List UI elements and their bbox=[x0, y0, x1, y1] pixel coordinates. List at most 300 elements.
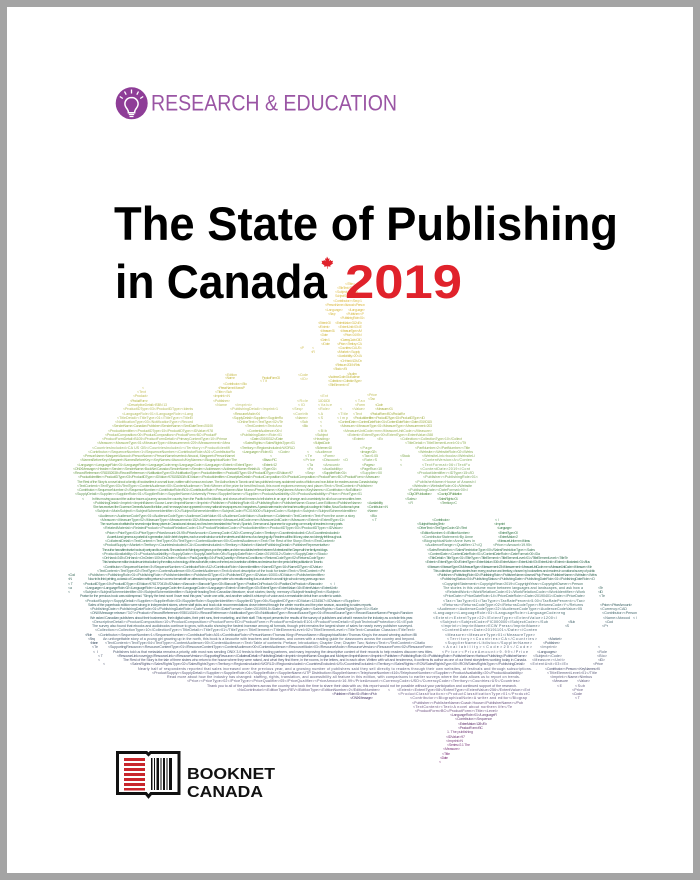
map of Canada drawn from lines of metadata text: <Name> bbox=[367, 509, 378, 513]
map of Canada drawn from lines of metadata text: ProductForm 03 bbox=[262, 376, 280, 380]
map of Canada drawn from lines of metadata text: <Subject><Main bbox=[335, 290, 358, 294]
map of Canada drawn from lines of metadata text: < bbox=[598, 645, 600, 649]
map of Canada drawn from lines of metadata text: <Title bbox=[442, 752, 450, 756]
map of Canada drawn from lines of metadata text: <T bbox=[68, 582, 74, 586]
map of Canada drawn from lines of metadata text: <Form bbox=[355, 403, 365, 407]
map of Canada drawn from lines of metadata text: <ID bbox=[298, 403, 305, 407]
map of Canada drawn from lines of metadata text: <IDValue>97 bbox=[446, 735, 465, 739]
map of Canada drawn from lines of metadata text: <Availability> bbox=[322, 467, 343, 471]
map of Canada drawn from lines of metadata text: < bbox=[82, 497, 84, 501]
map of Canada drawn from lines of metadata text: <ContentVersion>A</Conten bbox=[422, 458, 472, 462]
title bbox=[114, 197, 618, 308]
map of Canada drawn from lines of metadata text: <Publisher><PublisherName>Coach House</PublisherName></Pub bbox=[412, 701, 523, 705]
map of Canada drawn from lines of metadata text: <Returns><ReturnsCodeType>02</ReturnsCodeType><ReturnsCode>Y</Returns bbox=[442, 603, 583, 607]
map of Canada drawn from lines of metadata text: <Collection><CollectionType>10</Collect bbox=[400, 437, 462, 441]
map of Canada drawn from lines of metadata text: <SalesRights><SalesRightsType>01 bbox=[243, 441, 295, 445]
map of Canada drawn from lines of metadata text: <PageRun>10 bbox=[360, 467, 382, 471]
map of Canada drawn from lines of metadata text: <Ta bbox=[307, 463, 313, 467]
map of Canada drawn from lines of metadata text: <Price><PriceAmount>9.99</Price bbox=[442, 650, 528, 654]
map of Canada drawn from lines of metadata text: <Sub bbox=[300, 420, 308, 424]
map of Canada drawn from lines of metadata text: < bbox=[98, 658, 100, 662]
heading: research and education: RESEARCH & EDUCATION bbox=[151, 91, 397, 116]
map of Canada drawn from lines of metadata text: 1. The publishing bbox=[447, 730, 473, 734]
map of Canada drawn from lines of metadata text: <N bbox=[68, 577, 72, 581]
map of Canada drawn from lines of metadata text: <CopyrightStatement><CopyrightYear>2019</CopyrightYear><CopyrightOwner><Person bbox=[442, 582, 583, 586]
map of Canada drawn from lines of metadata text: <Seq> bbox=[305, 471, 315, 475]
map of Canada drawn from lines of metadata text: <Te bbox=[598, 586, 603, 590]
map of Canada drawn from lines of metadata text: <Contributor><N bbox=[367, 505, 388, 509]
map of Canada drawn from lines of metadata text: <CountryOfPublication bbox=[437, 492, 462, 496]
map of Canada drawn from lines of metadata text: Sales of the paperback edition were strong in independent stores, where staff picks and book club recommendations drove interest through the winter months and the prize season, according to sales reports. bbox=[88, 603, 372, 607]
icon: open book with barcode bbox=[118, 752, 179, 796]
map of Canada drawn from lines of metadata text: <Date bbox=[440, 756, 448, 760]
map of Canada drawn from lines of metadata text: < bbox=[68, 590, 70, 594]
header: research and education bbox=[116, 87, 397, 119]
map of Canada drawn from lines of metadata text: <OnlineText><TextType>02</Te bbox=[237, 420, 283, 424]
map of Canada drawn from lines of metadata text: <ProductFormDetail>B105</ProductFormDetail><PrimaryContentType>10</Primar bbox=[102, 437, 228, 441]
map of Canada drawn from lines of metadata text: < bbox=[307, 450, 309, 454]
map of Canada drawn from lines of metadata text: < bbox=[388, 688, 390, 692]
map of Canada drawn from lines of metadata text: <ContributorStatement>By Anne bbox=[422, 535, 473, 539]
map of Canada drawn from lines of metadata text: <Collection><CollectionType>10</CollectionType><TitleDetail><TitleType>01</TitleType><TitleElement><TitleElementLevel>02</TitleElementLevel><TitleText>Canadian Classics</TitleText> bbox=[95, 628, 415, 632]
map of Canada drawn from lines of metadata text: </Market><Supply bbox=[337, 350, 360, 354]
map of Canada drawn from lines of metadata text: <P bbox=[300, 346, 305, 350]
map of Canada drawn from lines of metadata text: <RecordReference>9781552638</RecordReference><NotificationType>03</NotificationType><ProductIdentifier><ProductIDType>15</ProductIDType><IDValue>97 bbox=[73, 471, 293, 475]
map of Canada drawn from lines of metadata text: <TextContent><TextType>02</TextType><ContentAudience>00</ContentAudience><Text>A short description of the book for trade</Text></TextContent><Pri bbox=[97, 569, 325, 573]
map of Canada drawn from lines of metadata text: <Tax bbox=[355, 399, 365, 403]
map of Canada drawn from lines of metadata text: <Audience><AudienceCodeType>01</AudienceCodeType><AudienceCodeValue>01</AudienceCodeValue></Audience><Collateral><TextContent><Text>From the cover: a story bbox=[98, 514, 355, 518]
map of Canada drawn from lines of metadata text: <Name>Atwood bbox=[603, 616, 630, 620]
map of Canada drawn from lines of metadata text: <ExtentValue>128</Ex bbox=[458, 722, 487, 726]
map of Canada drawn from lines of metadata text: <Subject><MainSubject/><SubjectSchemeIdentifier>10</SubjectSchemeIdentifier><SubjectCode>FIC019000</SubjectCode></Subject><Subject><SubjectSchemeIdentifier> bbox=[95, 509, 357, 513]
map of Canada drawn from lines of metadata text: Now in its third printing, a classic of Canadian writing returns in a new format with an afterword by a younger writer who recalls reading it as a student in a rural high school many years ago now. bbox=[88, 577, 325, 581]
map of Canada drawn from lines of metadata text: <ExtentUnit>03</E bbox=[338, 325, 363, 329]
map of Canada drawn from lines of metadata text: </Date bbox=[321, 342, 330, 346]
map of Canada drawn from lines of metadata text: Praise for the previous book was widespread. "Simply the best novel I have read this year," wrote one critic, and another called it a triumph of voice and a remarkable debut from a writer to watch. bbox=[80, 594, 342, 598]
map of Canada drawn from lines of metadata text: <Name bbox=[215, 403, 227, 407]
map of Canada drawn from lines of metadata text: <Language> bbox=[325, 308, 343, 312]
map of Canada drawn from lines of metadata text: <ID> bbox=[300, 377, 308, 381]
map of Canada drawn from lines of metadata text: <Contributor><Bio bbox=[223, 382, 247, 386]
map of Canada drawn from lines of metadata text: <ExtentValue>2 bbox=[498, 535, 518, 539]
map of Canada drawn from lines of metadata text: <Availability bbox=[367, 501, 383, 505]
map of Canada drawn from lines of metadata text: <PublishingRole>01< bbox=[340, 316, 365, 320]
map of Canada drawn from lines of metadata text: <MeasureType></M bbox=[340, 329, 362, 333]
map of Canada drawn from lines of metadata text: <R bbox=[408, 501, 413, 505]
map of Canada drawn from lines of metadata text: <Cod bbox=[605, 620, 613, 624]
map of Canada drawn from lines of metadata text: <Pr bbox=[602, 624, 609, 628]
map of Canada drawn from lines of metadata text: <Tax><TaxType>01</TaxType><TaxRatePercent>5.00</TaxRatePercent></Tax> bbox=[443, 599, 585, 603]
map of Canada drawn from lines of metadata text: <Contributor><Seq>1 bbox=[333, 299, 362, 303]
map of Canada drawn from lines of metadata text: The Rest of the Story is a novel about a family of booksellers in a small town, written with humour and care. The Author lives in Toronto and has published many acclaimed works of fiction and non-fiction for readers across Canada today. bbox=[77, 480, 378, 484]
map of Canada drawn from lines of metadata text: <Type>01< bbox=[262, 467, 277, 471]
map of Canada drawn from lines of metadata text: <S bbox=[318, 416, 324, 420]
map of Canada drawn from lines of metadata text: <Imprint><ImprintName>ECW Press</ImprintName> bbox=[441, 624, 540, 628]
map of Canada drawn from lines of metadata text: </Price><Territory>CA bbox=[337, 342, 363, 346]
map of Canada drawn from lines of metadata text: <MeasureUnit>mm</Meas bbox=[497, 539, 530, 543]
map of Canada drawn from lines of metadata text: <AudienceRange><Qualifier>17</Q bbox=[425, 543, 482, 547]
map of Canada drawn from lines of metadata text: <Date>1 bbox=[320, 338, 330, 342]
map of Canada drawn from lines of metadata text: <ContentDate><ContentDateRole>01</ContentDateRole><Date>20190115 bbox=[338, 420, 432, 424]
map of Canada drawn from lines of metadata text: <E bbox=[557, 684, 563, 688]
map of Canada drawn from lines of metadata text: <S bbox=[565, 624, 570, 628]
map of Canada drawn from lines of metadata text: <ONIXMessage><Header><Sender><SenderName>BookNet Canada</SenderName></Sender><Addressee><AddresseeName>Retail</A bbox=[73, 467, 261, 471]
map of Canada drawn from lines of metadata text: </ bbox=[330, 582, 335, 586]
map of Canada drawn from lines of metadata text: <Audience bbox=[315, 450, 332, 454]
map of Canada drawn from lines of metadata text: <Imprint><N bbox=[213, 394, 230, 398]
map of Canada drawn from lines of metadata text: <I bbox=[93, 650, 98, 654]
map of Canada drawn from lines of metadata text: <SupplierRole>01< bbox=[322, 471, 347, 475]
map of Canada drawn from lines of metadata text: < bbox=[439, 760, 441, 764]
map of Canada drawn from lines of metadata text: <SalesRights>01 bbox=[437, 497, 458, 501]
map of Canada drawn from lines of metadata text: <Bio bbox=[302, 424, 308, 428]
map of Canada drawn from lines of metadata text: <Text bbox=[353, 412, 362, 416]
map of Canada drawn from lines of metadata text: </ bbox=[633, 616, 637, 620]
map of Canada drawn from lines of metadata text: <Image>02< bbox=[360, 450, 377, 454]
map of Canada drawn from lines of metadata text: The author has written twelve books of poetry and four novels. She was born in Winnipeg and grew up on the prairies, and she now divides her time between Montreal and the Gaspe with her family and dogs. bbox=[102, 548, 328, 552]
map of Canada drawn from lines of metadata text: <ContentDate>2019</Cont bbox=[420, 467, 470, 471]
map of Canada drawn from lines of metadata text: <Stock></St bbox=[333, 367, 347, 371]
map of Canada drawn from lines of metadata text: <Ex bbox=[377, 437, 383, 441]
map of Canada drawn from lines of metadata text: <Extent><ExtentType>08</ExtentType><ExtentValue>256</ExtentValue><Ext bbox=[397, 688, 530, 692]
map of Canada drawn from lines of metadata text: <Price><PriceType>02</PriceType><PriceQualifier>05</PriceQualifier><PriceAmount>16.99</PriceAmount><CurrencyCode>USD</CurrencyCode><Territory><Countries>US</Countries> bbox=[187, 679, 520, 683]
map of Canada drawn from lines of metadata text: The survey also found that ebooks and audiobooks continue to grow, with audio showing the fastest increase among all formats, though print remains the largest share of sales for nearly every publisher surveyed. bbox=[92, 624, 413, 628]
map of Canada drawn from lines of metadata text: <Measure><MeasureType>01</MeasureType> bbox=[445, 633, 535, 637]
map of Canada drawn from lines of metadata text: <Bio> bbox=[597, 654, 607, 658]
map of Canada drawn from lines of metadata text: < bbox=[400, 458, 402, 462]
map of Canada drawn from lines of metadata text: </Title> bbox=[345, 282, 355, 286]
map of Canada drawn from lines of metadata text: <Form> bbox=[323, 454, 335, 458]
map of Canada drawn from lines of metadata text: <PublishingDetail><Imprint><ImprintName>Goose Lane</ImprintName></Imprint><Publisher><PublishingRole>01</PublishingRole><PublisherName>Goose Lane Editions</PublisherName> bbox=[93, 501, 362, 505]
map of Canada drawn from lines of metadata text: <ProductIDType>15</ProductIDType><IDValue>9781770415</IDValue><Barcode><BarcodeType>03</BarcodeType><PositionOnProduct>01</PositionOnProduct></Barcode> bbox=[83, 582, 323, 586]
map of Canada drawn from lines of metadata text: She has received the Governor General's Award for fiction, and her essays have appeared in many national newspapers and magazines. A passionate reader, she teaches writing at a college in Halifax, Nova Scotia each year. bbox=[93, 505, 360, 509]
map of Canada drawn from lines of metadata text: <MeasureUnitCode>mm</MeasureUnitCode></Measure> bbox=[343, 429, 432, 433]
map of Canada drawn from lines of metadata text: <Measure bbox=[552, 679, 568, 683]
map of Canada drawn from lines of metadata text: <Languages> bbox=[537, 650, 557, 654]
map of Canada drawn from lines of metadata text: <SalesRights><SalesRightsType>02</SalesRightsType><Territory><RegionsIncluded>WORLD</RegionsIncluded><CountriesExcluded>US</CountriesExcluded></Territory></SalesRights><ROWSalesRightsType>00</ROWSalesRightsType></PublishingDetail> bbox=[130, 662, 525, 666]
map of Canada drawn from lines of metadata text: <Measure><MeasureType>03</MeasureType><Measurement>23</Measurement><MeasureUnitCode>mm</MeasureUnitCode></Measure><Me bbox=[427, 565, 592, 569]
map of Canada drawn from lines of metadata text: <SupplyDetail><Supplier><SupplierRole>01</SupplierRole><SupplierName>University Press</SupplierName></Supplier><ProductAvailability>20</ProductAvailability><Price><PriceType>01 bbox=[75, 492, 362, 496]
map of Canada drawn from lines of metadata text: An unforgettable story of a young girl growing up in the north, this book is a favourite with teachers and librarians, and comes with a reading guide for classrooms across the country and beyond. bbox=[103, 637, 415, 641]
map of Canada drawn from lines of metadata text: <Tax>0.05 bbox=[362, 454, 378, 458]
map of Canada drawn from lines of metadata text: A careful and generous portrait of a generation, told in brief chapters, each a small window onto the streets and kitchens of a changing city. Readers will find it funny, wise and deeply felt throughout. bbox=[107, 535, 342, 539]
map of Canada drawn from lines of metadata text: <Cod bbox=[68, 573, 75, 577]
map of Canada drawn from lines of metadata text: <Series>2.1 The bbox=[447, 743, 470, 747]
map of Canada drawn from lines of metadata text: <Supplier>00 bbox=[360, 471, 382, 475]
map of Canada drawn from lines of metadata text: <CountriesIncluded>CA US GB</CountriesIncluded></Territory><ProductIdentifi bbox=[92, 446, 230, 450]
map of Canada drawn from lines of metadata text: <Tax bbox=[368, 397, 375, 401]
map of Canada drawn from lines of metadata text: <Seq bbox=[88, 637, 95, 641]
map of Canada drawn from lines of metadata text: <TitleElementLevel>01</Title bbox=[547, 671, 597, 675]
map of Canada drawn from lines of metadata text: <Imprint> bbox=[235, 403, 252, 407]
wordmark bbox=[187, 766, 276, 801]
map of Canada drawn from lines of metadata text: <WebsiteLink>books</WebsiteLi bbox=[422, 454, 475, 458]
map of Canada drawn from lines of metadata text: SubjectScheme bbox=[335, 294, 355, 298]
map of Canada drawn from lines of metadata text: <Contributor><Sequence bbox=[455, 717, 492, 721]
map of Canada drawn from lines of metadata text: <Date bbox=[320, 333, 328, 337]
map of Canada drawn from lines of metadata text: <Language><LanguageRole>02</LanguageRole><LanguageCode>fre</LanguageCode></Language><Extent><ExtentType>03</ExtentType><ExtentValue>16</ExtentValue><ExtentUnit> bbox=[85, 586, 338, 590]
map of Canada drawn from lines of metadata text: <Fo bbox=[307, 467, 313, 471]
map of Canada drawn from lines of metadata text: <ContentAudience>00</ bbox=[247, 429, 282, 433]
map of Canada drawn from lines of metadata text: This handsome edition includes an introduction by the editor, a chronology of the author's life, notes on the text, and a selection of letters and reviews from the period of first publication in Toronto. bbox=[102, 560, 323, 564]
map of Canada drawn from lines of metadata text: <ProductSupply><SupplyDetail><Supplier><SupplierRole>03</SupplierRole><SupplierIdentifier><SupplierIDType>06</SupplierIDType><IDValue>1234567</IDValue></Supplier> bbox=[85, 599, 360, 603]
map of Canada drawn from lines of metadata text: <Territory><Countries>CA</Countries> bbox=[447, 637, 537, 641]
map of Canada drawn from lines of metadata text: <Discount> bbox=[322, 458, 340, 462]
map of Canada drawn from lines of metadata text: <Price><PriceType>01</PriceType><PriceAmount>24.95</PriceAmount><CurrencyCode>CAD</CurrencyCode><Territory><CountriesIncluded>CA</CountriesIncluded> bbox=[105, 531, 340, 535]
map of Canada drawn from lines of metadata text: <ONIXMessage release="3.0"><Product><RecordReference>9780143191</RecordReference><NotificationType>03</NotificationType><RecordSourceType>01</RecordSourceType><RecordSourceName>Penguin Random bbox=[90, 611, 413, 615]
map of Canada drawn from lines of metadata text: <SalesRestriction><SalesRestrictionType>00</SalesRestrictionType><Sales bbox=[427, 548, 535, 552]
map of Canada drawn from lines of metadata text: <ProductIdentifier><ProductIDType>15</ProductIDType><ID bbox=[353, 416, 425, 420]
map of Canada drawn from lines of metadata text: <ProductSupply><Market><Territory><CountriesIncluded>CA</CountriesIncluded></Territory></Market><MarketPublishingDetail><PublisherRepresentative> bbox=[103, 543, 330, 547]
map of Canada drawn from lines of metadata text: <Language> bbox=[497, 526, 512, 530]
map of Canada drawn from lines of metadata text: <EditionNumber>1</EditionNumber> bbox=[420, 531, 470, 535]
map of Canada drawn from lines of metadata text: <Publisher><PublishingRole>02</PublishingRole><PublisherName>Arsenal Pulp Press</PublisherName><Website><Webs bbox=[437, 573, 597, 577]
map of Canada drawn from lines of metadata text: <PublishingDate><DateFormat>00</ bbox=[408, 488, 468, 492]
map of Canada drawn from lines of metadata text: <SenderName>Canadian Publisher</SenderName><SentDateTime>20190 bbox=[112, 424, 213, 428]
map of Canada drawn from lines of metadata text: </ONIXMessage> bbox=[350, 696, 373, 700]
map of Canada drawn from lines of metadata text: <Extent><ExtentType>22</ExtentType><ExtentValue>1200</ bbox=[433, 616, 557, 620]
map of Canada drawn from lines of metadata text: <ResourceMode>04 bbox=[233, 412, 260, 416]
map of Canada drawn from lines of metadata text: <Availability>20</A bbox=[337, 354, 363, 358]
map of Canada drawn from lines of metadata text: <Title bbox=[338, 412, 348, 416]
map of Canada drawn from lines of metadata text: <Role> bbox=[318, 407, 330, 411]
map of Canada drawn from lines of metadata text: <Pages> bbox=[362, 463, 375, 467]
map of Canada drawn from lines of metadata text: <Name bbox=[225, 376, 235, 380]
map of Canada drawn from lines of metadata text: </ bbox=[495, 518, 499, 522]
map of Canada drawn from lines of metadata text: <Measure> bbox=[443, 747, 460, 751]
map of Canada drawn from lines of metadata text: <Role bbox=[297, 399, 308, 403]
map of Canada drawn from lines of metadata text: <Price>24.95</ bbox=[343, 333, 362, 337]
map of Canada drawn from lines of metadata text: <DescriptiveDetail>ISBN 13 bbox=[127, 403, 167, 407]
map of Canada drawn from lines of metadata text: < bbox=[400, 463, 402, 467]
map of Canada drawn from lines of metadata text: <SupportingResource><ResourceContentType>01</ResourceContentType><ContentAudience>00</ContentAudience><ResourceMode>03</ResourceMode><ResourceVersion><ResourceForm>02</ResourceForm> bbox=[108, 645, 433, 649]
map of Canada drawn from lines of metadata text: <Seq> bbox=[328, 312, 336, 316]
map of Canada drawn from lines of metadata text: <Market> bbox=[548, 637, 562, 641]
map of Canada drawn from lines of metadata text: <Website><WebsiteRole>01</Website bbox=[412, 484, 472, 488]
map of Canada drawn from lines of metadata text: <ExtentType>00 bbox=[498, 531, 518, 535]
map of Canada drawn from lines of metadata text: <Stock bbox=[400, 454, 410, 458]
map of Canada drawn from lines of metadata text: <Te bbox=[305, 454, 312, 458]
map of Canada drawn from lines of metadata text: <Value> bbox=[577, 679, 590, 683]
map of Canada drawn from lines of metadata text: <Code> bbox=[278, 450, 290, 454]
map of Canada drawn from lines of metadata text: <NotificationType>03</NotificationType><Record bbox=[115, 420, 193, 424]
map of Canada drawn from lines of metadata text: <Publisher><PublishingRole>01</PublishingRole><PublisherIdentifier><PublisherIDType>01</PublisherIDType><IDValue>10001</IDValue></PublisherIdentifier> bbox=[88, 573, 325, 577]
map of Canada drawn from lines of metadata text: <CollateralDetail><TextContent><TextType>03</TextType><ContentAudience>00</ContentAudience><Text>The Rest of the Story</Text></TextContent> bbox=[105, 539, 335, 543]
map of Canada drawn from lines of metadata text: <SupplierName>Litdistco</SupplierName> bbox=[445, 641, 532, 645]
map of Canada drawn from lines of metadata text: <NamesBeforeKey>Margaret</NamesBeforeKey><KeyNames>Atwood</KeyNames><BiographicalNote>The bbox=[80, 458, 237, 462]
map of Canada drawn from lines of metadata text: <Value> bbox=[352, 407, 365, 411]
map of Canada drawn from lines of metadata text: <Heading> bbox=[313, 437, 330, 441]
map of Canada drawn from lines of metadata text: <Measure><Unit> bbox=[532, 658, 565, 662]
map of Canada drawn from lines of metadata text: < bbox=[312, 346, 314, 350]
map of Canada drawn from lines of metadata text: <Seq> bbox=[292, 407, 303, 411]
map of Canada drawn from lines of metadata text: <Measure><MeasureType>01</MeasureType><Measurement>229</Measurement><Mea bbox=[97, 441, 230, 445]
title line two: in Canada bbox=[115, 255, 328, 308]
map of Canada drawn from lines of metadata text: <Subject><SubjectCode>FIC000000</SubjectCode></Sub bbox=[440, 620, 548, 624]
map of Canada drawn from lines of metadata text: <ProductComposition>00</ProductComposition><ProductForm>BC</ProductF bbox=[105, 433, 218, 437]
map of Canada drawn from lines of metadata text: <Imprint> bbox=[540, 645, 557, 649]
map of Canada drawn from lines of metadata text: <RelatedWork><WorkRelationCode>01</WorkRelationCode><WorkIdentifier><Work bbox=[445, 590, 585, 594]
map of Canada drawn from lines of metadata text: <ProductClassification><ProductClassificationType>01</ProductC bbox=[398, 692, 530, 696]
map of Canada drawn from lines of metadata text: < bbox=[142, 386, 144, 390]
map of Canada drawn from lines of metadata text: In this moving account the author traces a journey across the country, from the Pacific to the Atlantic, and shows what it means to tell stories in an age of change and uncertainty for all of our communities here. bbox=[92, 497, 362, 501]
map of Canada drawn from lines of metadata text: <Rate>S bbox=[362, 458, 378, 462]
map of Canada drawn from lines of metadata text: <DescriptiveDetail><ProductComposition>10</ProductComposition><ProductForm>ED</ProductForm><ProductFormDetail>E101</ProductFormDetail><EpubTechnicalProtection>01</Epub bbox=[92, 620, 413, 624]
map of Canada drawn from lines of metadata text: <ProductIDType>03</ProductIDType><Idents bbox=[123, 407, 193, 411]
map of Canada drawn from lines of metadata text: <Subject><SubjectSchemeIdentifier>20</SubjectSchemeIdentifier><SubjectHeadingText>Canadian literature; short stories; family; memory</SubjectHeadingText></Subject> bbox=[83, 590, 340, 594]
map of Canada drawn from lines of metadata text: <Publisher> bbox=[543, 641, 560, 645]
map of Canada drawn from lines of metadata text: <Publisher> bbox=[213, 399, 230, 403]
map of Canada drawn from lines of metadata text: <Price bbox=[303, 458, 315, 462]
map of Canada drawn from lines of metadata text: <Subject bbox=[315, 433, 328, 437]
map of Canada drawn from lines of metadata text: <Value bbox=[318, 403, 332, 407]
map of Canada drawn from lines of metadata text: <SubjectCode bbox=[313, 441, 330, 445]
map of Canada drawn from lines of metadata text: <Price bbox=[572, 688, 583, 692]
icon: light bulb bbox=[116, 87, 148, 119]
map of Canada drawn from lines of metadata text: <ProductIdentifier><ProductIDType>15</ProductIDType><IDValue>978 bbox=[108, 429, 213, 433]
map of Canada drawn from lines of metadata text: <Language><Role>01 bbox=[242, 450, 273, 454]
map of Canada drawn from lines of metadata text: <TextFormat>06</TextFo bbox=[422, 463, 470, 467]
map of Canada drawn from lines of metadata text: </Extent> bbox=[318, 325, 330, 329]
map of Canada drawn from lines of metadata text: <PublishingDate><Role>01 bbox=[240, 433, 282, 437]
map of Canada drawn from lines of metadata text: <Title><Sub bbox=[215, 390, 232, 394]
map of Canada drawn from lines of metadata text: </Language> bbox=[348, 308, 365, 312]
map of Canada drawn from lines of metadata text: <Te bbox=[92, 645, 98, 649]
map of Canada drawn from lines of metadata text: <TextContent><TextType>04</TextType><ContentAudience>00</ContentAudience><Text>Table of contents: Preface; Introduction; Chapter One; Chapter Two; Notes</Text></TextContent><Citatio bbox=[105, 641, 425, 645]
map of Canada drawn from lines of metadata text: <Measure>01 bbox=[375, 407, 393, 411]
map of Canada drawn from lines of metadata text: <Territory>C bbox=[440, 501, 457, 505]
map of Canada drawn from lines of metadata text: <T bbox=[575, 696, 581, 700]
map of Canada drawn from lines of metadata text: <TitleDetail><TitleType>01</TitleType><TitleElement><TitleElementLevel>01</TitleElementLevel><TitleTe bbox=[428, 556, 568, 560]
map of Canada drawn from lines of metadata text: <T bbox=[98, 654, 104, 658]
map of Canada drawn from lines of metadata text: <Scheme>10 bbox=[315, 446, 332, 450]
map of Canada drawn from lines of metadata text: <Imprint><Name>Nimbus bbox=[550, 675, 592, 679]
map of Canada drawn from lines of metadata text: <Language><LanguageRole>01</LanguageRole><LanguageCode>eng bbox=[433, 611, 565, 615]
map of Canada drawn from lines of metadata text: <OtherText><TextTypeCode>02</Text bbox=[417, 526, 467, 530]
map of Canada drawn from lines of metadata text: <Bisac>FIC bbox=[262, 458, 277, 462]
map of Canada drawn from lines of metadata text: <Contrib bbox=[293, 412, 308, 416]
map of Canada drawn from lines of metadata text: <Contributor> bbox=[432, 518, 450, 522]
map of Canada drawn from lines of metadata text: <PublisherName>House of Anansi</ bbox=[415, 480, 476, 484]
map of Canada drawn from lines of metadata text: <Role bbox=[85, 633, 92, 637]
map of Canada drawn from lines of metadata text: <Bib bbox=[318, 429, 327, 433]
map of Canada drawn from lines of metadata text: <Extent>00 bbox=[318, 321, 331, 325]
map of Canada drawn from lines of metadata text: <Contributor><SequenceNumber>3</SequenceNumber><ContributorRole>A12</ContributorRole><NameIdentifier><NameIDType>16</NameIDType><IDValue> bbox=[103, 565, 323, 569]
map of Canada drawn from lines of metadata text: <Page bbox=[360, 446, 372, 450]
map of Canada drawn from lines of metadata text: <Imp bbox=[337, 416, 348, 420]
map of Canada drawn from lines of metadata text: <CityOfPublication> bbox=[407, 492, 432, 496]
map of Canada drawn from lines of metadata text: <PublishingDetail><Imprint>1 bbox=[230, 407, 278, 411]
map of Canada drawn from lines of metadata text: <PriceDate><PriceDateRole>14</PriceDateRole><Date>20190401</Date></PriceDate> bbox=[443, 594, 585, 598]
map of Canada drawn from lines of metadata text: <R bbox=[311, 350, 315, 354]
year 2019: 2019 bbox=[345, 255, 462, 308]
map of Canada drawn from lines of metadata text: <Imprint bbox=[494, 522, 505, 526]
map of Canada drawn from lines of metadata text: <Extent> bbox=[352, 437, 365, 441]
map of Canada drawn from lines of metadata text: <Price><PriceAmount> bbox=[600, 603, 632, 607]
map of Canada drawn from lines of metadata text: <Extent><ExtentType>00</ExtentType><ExtentValue>336</ExtentValue><ExtentUnit>03</ExtentUnit></Extent><Illustrated>01</Illus bbox=[425, 560, 590, 564]
map of Canada drawn from lines of metadata text: <Contributor><SequenceNumber>2</SequenceNumber><ContributorRole>B01</ContributorRole><PersonName>Alice Munro</PersonName><KeyNames>Munro</KeyNames></Contributor><NoEdition/> bbox=[77, 488, 362, 492]
map of Canada drawn from lines of metadata text: <Audien bbox=[347, 372, 357, 376]
map of Canada drawn from lines of metadata text: <Price><Amount>19.95< bbox=[493, 543, 532, 547]
map of Canada drawn from lines of metadata text: <CurrencyCode>CAD bbox=[340, 338, 362, 342]
icon: red maple leaf bbox=[321, 256, 333, 269]
map of Canada drawn from lines of metadata text: <TitleDetail><TitleElementLevel>01</Tit bbox=[405, 441, 466, 445]
map of Canada drawn from lines of metadata text: < bbox=[103, 662, 105, 666]
map of Canada drawn from lines of metadata text: Read more about how the industry has changed: staffing, rights, translation, and accessibility all feature in this edition, with comparisons to earlier surveys where the data allows us to report on trends. bbox=[167, 675, 520, 679]
map of Canada drawn from lines of metadata text: <Te bbox=[599, 594, 605, 598]
wordmark: BOOKNET bbox=[187, 766, 276, 783]
map of Canada drawn from lines of metadata text: <ContentDate><ContentDateRole>01</ContentDateRole><DateFormat>00</Da bbox=[428, 552, 540, 556]
map of Canada drawn from lines of metadata text: <TextContent><TextType>03</TextType><ContentAudience>00</ContentAudience><Text>Winner of the prize for best first book, this novel explores memory and place</Text></TextContent><Publisher> bbox=[77, 484, 373, 488]
map of Canada drawn from lines of metadata text: <RelatedMaterial><RelatedProduct><ProductRelationCode>13</ProductRelationCode><ProductIdentifier><ProductIDType>03</ProductIDType><IDValue> bbox=[103, 526, 343, 530]
map of Canada drawn from lines of metadata text: <Currency>CAD bbox=[600, 607, 627, 611]
map of Canada drawn from lines of metadata text: <PersonName>Munro</P bbox=[218, 386, 246, 390]
map of Canada drawn from lines of metadata text: 1.00 1000 bbox=[318, 399, 330, 403]
map of Canada drawn from lines of metadata text: <Publisher><Role>01</Role></Pub bbox=[332, 692, 377, 696]
map of Canada drawn from lines of metadata text: The Rest of the Story is the tale of three sisters who return to the house where they were raised, and what they find there, in the rooms, in the letters, and in each other. Written with wit and tenderness, it confirms its author as one of our finest storytellers working today in Canada. bbox=[123, 658, 527, 662]
map of Canada drawn from lines of metadata text: <PartNumber>2</PartNumber><Title bbox=[415, 446, 470, 450]
map of Canada drawn from lines of metadata text: <Code bbox=[572, 692, 582, 696]
map of Canada drawn from lines of metadata text: We asked Canadian publishers about their businesses, their digital sales, their print runs, their marketing, and their staff. This report presents the results of the survey of publishers and what it means for the industry as a whole this year. bbox=[90, 616, 413, 620]
map of Canada drawn from lines of metadata text: <Reissue>2019</Reis bbox=[335, 363, 360, 367]
map of Canada drawn from lines of metadata text: <Amount> bbox=[323, 463, 340, 467]
map of Canada drawn from lines of metadata text: <OnHand>120</On bbox=[340, 359, 362, 363]
map of Canada drawn from lines of metadata text: Publishers told us that metadata remains a priority, with most now sending ONIX 3.0 feeds to their trading partners, and many improving the descriptive content of their records to help readers discover new titles. bbox=[113, 650, 433, 654]
map of Canada drawn from lines of metadata text: <Availability><Code>20</Code> bbox=[443, 645, 532, 649]
map of Canada drawn from lines of metadata text: <Sub bbox=[568, 620, 575, 624]
map of Canada drawn from lines of metadata text: <TextContent><Text>A no bbox=[245, 424, 282, 428]
logo: booknet canada bbox=[118, 752, 276, 801]
map of Canada drawn from lines of metadata text: <Ext bbox=[320, 394, 328, 398]
map of Canada drawn from lines of metadata text: <ProductAvailability>21</ProductAvailability><SupplyDate><SupplyDateRole>08</SupplyDateRole><Date>20190312</Date></SupplyDate><Stock> bbox=[102, 552, 328, 556]
map of Canada drawn from lines of metadata text: <Language><LanguageRole>01</LanguageRole><LanguageCode>eng</LanguageCode></Language><Extent><ExtentType> bbox=[77, 463, 253, 467]
map of Canada drawn from lines of metadata text: This collection gathers stories from every province and territory, chosen by booksellers and readers in a national survey of public bbox=[433, 569, 595, 573]
map of Canada drawn from lines of metadata text: < bbox=[340, 407, 342, 411]
map of Canada drawn from lines of metadata text: <LanguageRole>01</LanguageR bbox=[450, 713, 497, 717]
map of Canada drawn from lines of metadata text: <Price bbox=[367, 393, 377, 397]
map of Canada drawn from lines of metadata text: The novel was shortlisted for several major literary prizes in Canada and abroad, and has been translated into French, Spanish, German and Japanese for a growing community of readers in many parts. bbox=[100, 522, 343, 526]
map of Canada drawn from lines of metadata text: <Contributor><SequenceNumber>1</SequenceNumber><ContributorRole>A01</ContributorRo bbox=[88, 450, 235, 454]
map of Canada drawn from lines of metadata text: <Collection><CollectionType> bbox=[328, 379, 362, 383]
map of Canada drawn from lines of metadata text: Nearly half of respondents reported that sales increased over the previous year, and a growing number of publishers said they sell directly to readers through their own websites, at festivals and through subscriptions. bbox=[138, 667, 532, 671]
map of Canada drawn from lines of metadata text: <A bbox=[318, 412, 324, 416]
map of Canada drawn from lines of metadata text: <Tit bbox=[260, 379, 267, 383]
map of Canada drawn from lines of metadata text: <ProductForm>BC bbox=[458, 726, 483, 730]
map of Canada drawn from lines of metadata text: <Role bbox=[597, 650, 607, 654]
map of Canada drawn from lines of metadata text: <PublishingDate><PublishingDateRole>01</PublishingDateRole><DateFormat>00</DateFormat><Date>20190915</Date></PublishingDate><SalesRights><SalesRightsType>01</Sale bbox=[90, 607, 378, 611]
map of Canada drawn from lines of metadata text: <BiographicalNote>Anne lives in bbox=[422, 539, 475, 543]
map of Canada drawn from lines of metadata text: <Territory><RegionsIncluded>WORLD bbox=[240, 446, 295, 450]
map of Canada drawn from lines of metadata text: <TitleDetail><TitleType>01</TitleType><TitleEl bbox=[117, 416, 193, 420]
map of Canada drawn from lines of metadata text: <ProductForm> bbox=[130, 399, 148, 403]
map of Canada drawn from lines of metadata text: <PersonName>Margaret Atwood</PersonName><PersonNameInverted>Atwood, Margaret</PersonNameI bbox=[83, 454, 235, 458]
map of Canada drawn from lines of metadata text: <Website><WebsiteRole>02</Webs bbox=[418, 450, 473, 454]
map of Canada drawn from lines of metadata text: <NoContributor/><EditionType>REV</EditionType><EditionNumber>2</EditionNumber> bbox=[237, 688, 380, 692]
map of Canada drawn from lines of metadata text: <Measure><MeasureType>02</MeasureType><Measurement>152</Measurement><MeasureUnitCode>mm</MeasureUnitCode></Measure><Extent><ExtentType>11< bbox=[100, 518, 345, 522]
map of Canada drawn from lines of metadata text: <Contributor><Person bbox=[602, 611, 637, 615]
map of Canada drawn from lines of metadata text: <AudienceCode>01</Audience bbox=[328, 375, 360, 379]
map of Canada drawn from lines of metadata text: <Audience><AudienceCodeType>22</AudienceCodeType><AudienceCodeValue>05 bbox=[437, 607, 582, 611]
map of Canada drawn from lines of metadata text: <Imprint>N bbox=[446, 739, 463, 743]
map of Canada drawn from lines of metadata text: <a bbox=[68, 586, 72, 590]
map of Canada drawn from lines of metadata text: <D bbox=[343, 458, 348, 462]
map of Canada drawn from lines of metadata text: <Contributor><Person><KeyNames>Ki bbox=[545, 667, 600, 671]
map of Canada drawn from lines of metadata text: <ResourceLink>cover.jpg</ResourceLink></ResourceVersion></SupportingResource></CollateralDetail><PublishingDetail><Imprint><ImprintName>Douglas and McIntyre</ImprintName></Imprint><Publisher><PublishingRole>01</PublishingRole><PublisherName>Harbour Publishing</PublisherName> bbox=[117, 654, 527, 658]
map of Canada drawn from lines of metadata text: <Text bbox=[137, 390, 146, 394]
map of Canada drawn from lines of metadata text: <Date>20190312</Date bbox=[250, 437, 283, 441]
map of Canada drawn from lines of metadata text: . bbox=[536, 667, 537, 671]
title line one: The State of Publishing bbox=[114, 197, 618, 250]
